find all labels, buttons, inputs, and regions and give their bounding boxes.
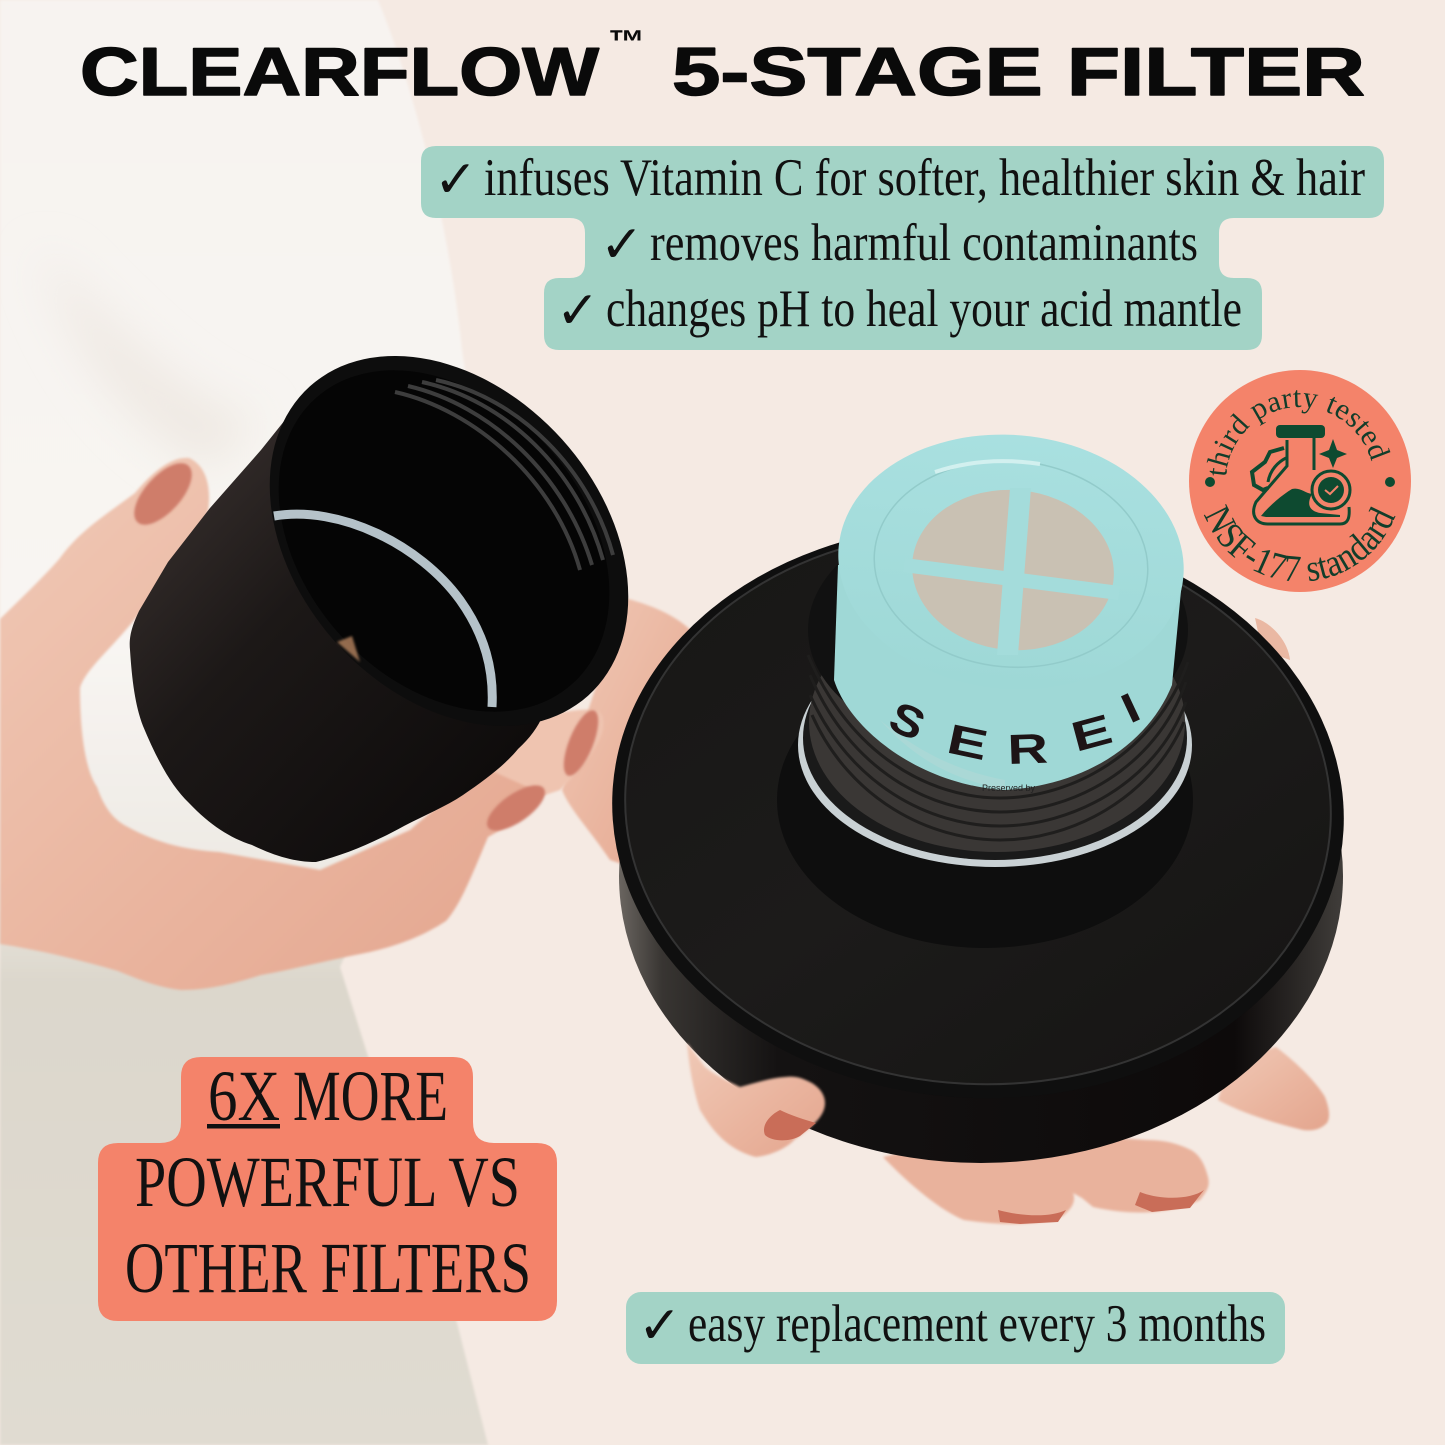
benefit: contaminants: ✓: [600, 215, 644, 275]
photo: left index finger: [490, 710, 604, 795]
badge dots: [1205, 477, 1395, 487]
badge bottom text: NSF-177 standard: [1204, 504, 1396, 581]
callout: 6x more powerful: [98, 1056, 557, 1321]
photo: teal filter cartridge: [828, 420, 1194, 793]
badge: third party tested: [1178, 370, 1411, 622]
mesh window: [905, 482, 1121, 658]
photo: right hand front finger: [687, 1043, 825, 1157]
callout line two: POWERFUL VS: [135, 1142, 520, 1222]
title: ™: [608, 23, 645, 60]
brand lettering: S: [882, 691, 933, 750]
photo: white shirt: [0, 0, 500, 1445]
title: CLEARFLOW: [80, 34, 600, 110]
callout line three: OTHER FILTERS: [125, 1228, 531, 1308]
fingernails: [998, 1190, 1204, 1224]
callout background: [98, 1057, 557, 1321]
photo: black cap: [130, 285, 701, 862]
title: 5-STAGE FILTER: [672, 34, 1365, 110]
hub seal ring: [798, 623, 1192, 867]
pill background: [626, 1292, 1285, 1364]
badge disc: [1189, 370, 1411, 592]
hub upper shoulder: [808, 508, 1188, 752]
callout line one: 6X: [208, 1056, 280, 1136]
benefit highlights: [421, 146, 1384, 350]
window cross bars: [903, 488, 1120, 655]
benefit: pH: changes pH to heal your acid mantle: [606, 280, 1242, 338]
cap outer body: [130, 420, 543, 862]
brand lettering: I: [1114, 684, 1147, 733]
brand lettering: E: [943, 715, 992, 769]
cap threads: [395, 380, 613, 570]
replacement text: easy replacement every 3 months: [688, 1295, 1266, 1353]
photo: right hand rear fingers: [883, 618, 1329, 1224]
icon: flask with gear and check: [1252, 425, 1350, 524]
title: [80, 23, 1365, 110]
check mark: ✓: [638, 1296, 682, 1356]
hub thread stack: [808, 592, 1188, 852]
callout line one: [207, 1056, 448, 1136]
photo: right arm behind base: [562, 598, 700, 870]
cap interior: [211, 305, 677, 777]
base side wall: [619, 589, 1343, 1163]
cap seal ring: [274, 514, 492, 707]
benefit: pH: ✓: [556, 281, 600, 341]
base top face: [597, 505, 1359, 1117]
brand lettering: [882, 684, 1147, 773]
cap reflection: [337, 636, 360, 662]
benefit: contaminants: removes harmful contaminants: [650, 214, 1198, 272]
front fingernail: [764, 1110, 816, 1140]
pill backgrounds: [421, 146, 1384, 350]
benefit: vitamin c: ✓: [434, 150, 478, 210]
badge top text: third party tested: [1206, 390, 1390, 476]
cartridge wall: [834, 565, 1183, 790]
callout line one: MORE: [293, 1056, 448, 1136]
brand lettering: E: [1066, 705, 1117, 761]
benefit: easy replacement: [626, 1292, 1285, 1364]
photo: black shower filter base: [597, 505, 1359, 1163]
cap rim: [197, 285, 701, 797]
hub lower collar: [777, 652, 1193, 948]
cartridge lid: [828, 420, 1194, 704]
brand lettering: R: [1007, 725, 1049, 773]
photo: left hand back: [0, 458, 547, 990]
photo: nails on left hand: [124, 454, 605, 839]
small print: Preserved by: [982, 783, 1036, 793]
